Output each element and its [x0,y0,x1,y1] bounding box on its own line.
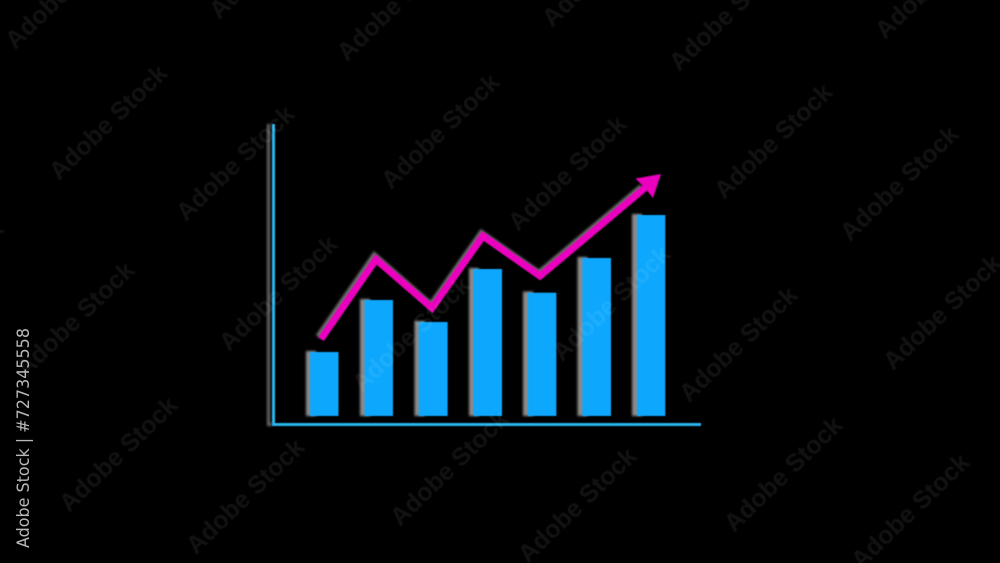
watermarks: Adobe Stock [835,120,964,246]
trend arrow [321,174,661,339]
watermarks: Adobe Stock [347,271,476,397]
stock id label: Adobe Stock | #727345558 [14,328,34,548]
watermarks: Adobe Stock [171,100,300,226]
watermarks: Adobe Stock [547,240,676,366]
watermarks: Adobe Stock [503,110,632,236]
trend line shadow [318,187,642,337]
watermarks: Adobe Stock [376,68,505,194]
watermarks: Adobe Stock [54,391,183,517]
axis shadows [267,124,272,426]
watermarks: Adobe Stock [385,405,514,531]
watermarks: Adobe Stock [214,230,343,356]
watermarks: Adobe Stock [44,59,173,185]
watermarks: Adobe Stock [181,433,310,559]
watermarks: Adobe Stock [709,78,838,204]
bar chart [310,215,665,416]
watermarks: Adobe Stock [719,411,848,537]
watermarks: Adobe Stock [11,256,140,382]
bar shadows [306,214,642,416]
chart axes [272,124,701,426]
watermarks: Adobe Stock [674,281,803,407]
